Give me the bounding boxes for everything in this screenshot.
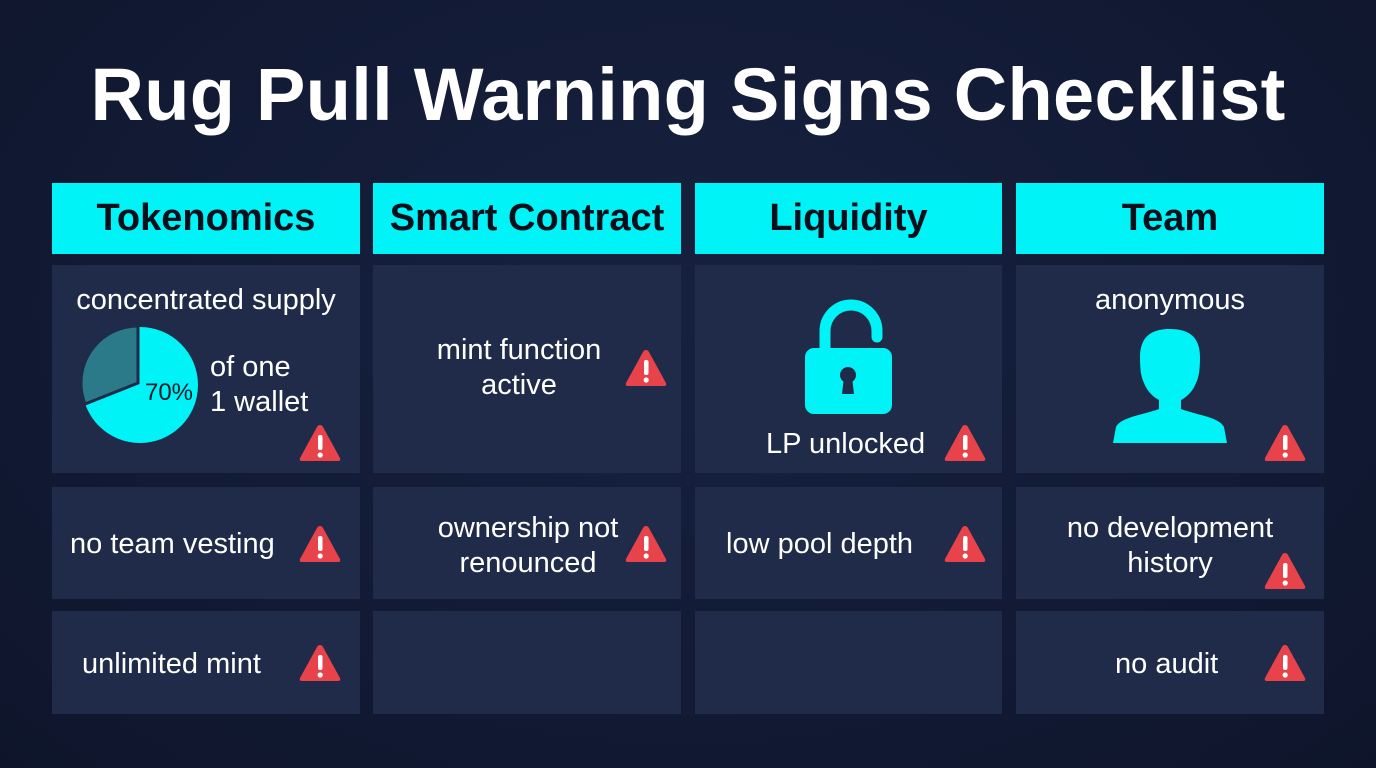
icon: warning bbox=[944, 526, 986, 562]
text: ownership not renounced bbox=[438, 512, 618, 579]
text: of one 1 wallet: of one bbox=[210, 351, 291, 383]
header: Tokenomics bbox=[52, 183, 360, 254]
icon: warning bbox=[1264, 553, 1306, 589]
panel: low pool depth bbox=[695, 487, 1002, 599]
chart: pie 70%: 70% bbox=[145, 379, 193, 406]
header: Team: Team bbox=[1122, 197, 1218, 239]
text: no development history bbox=[1067, 512, 1273, 579]
panel: no audit bbox=[1016, 611, 1324, 714]
text: low pool depth: low pool depth bbox=[726, 528, 913, 560]
text: no audit: no audit bbox=[1115, 648, 1218, 680]
panel: empty liquidity bbox=[695, 611, 1002, 714]
panel: ownership not renounced bbox=[373, 487, 681, 599]
title: Rug Pull Warning Signs Checklist bbox=[90, 53, 1286, 136]
text: no development history: history bbox=[1127, 547, 1213, 579]
header: Smart Contract bbox=[373, 183, 681, 254]
text: of one 1 wallet: 1 wallet bbox=[210, 386, 308, 418]
panel: unlimited mint bbox=[52, 611, 360, 714]
text: LP unlocked: LP unlocked bbox=[766, 428, 925, 460]
text: no development history: no development bbox=[1067, 512, 1273, 544]
header: Liquidity: Liquidity bbox=[769, 197, 928, 239]
icon: warning bbox=[1264, 425, 1306, 461]
icon: warning bbox=[944, 425, 986, 461]
header: Tokenomics: Tokenomics bbox=[97, 197, 315, 239]
panel: LP unlocked bbox=[695, 265, 1002, 473]
panel: no team vesting bbox=[52, 487, 360, 599]
text: unlimited mint: unlimited mint bbox=[82, 648, 261, 680]
panel: anonymous bbox=[1016, 265, 1324, 473]
text: anonymous: anonymous bbox=[1095, 284, 1245, 316]
icon: warning bbox=[300, 425, 340, 461]
text: mint function active bbox=[437, 334, 601, 401]
icon: open padlock bbox=[805, 300, 892, 414]
text: of one 1 wallet bbox=[210, 351, 308, 418]
text: concentrated supply: concentrated supply bbox=[76, 284, 336, 316]
text: no team vesting: no team vesting bbox=[70, 528, 275, 560]
chart: pie 70% bbox=[82, 327, 198, 443]
icon: person silhouette bbox=[1113, 329, 1227, 443]
panel: no development history bbox=[1016, 487, 1324, 599]
panel: empty smart contract bbox=[373, 611, 681, 714]
panel: mint function active bbox=[373, 265, 681, 473]
header: Liquidity bbox=[695, 183, 1002, 254]
text: ownership not renounced: renounced bbox=[459, 547, 597, 579]
text: mint function active: mint function bbox=[437, 334, 601, 366]
icon: warning bbox=[626, 350, 666, 386]
header: Team bbox=[1016, 183, 1324, 254]
panel: concentrated supply bbox=[52, 265, 360, 473]
icon: warning bbox=[300, 645, 340, 681]
icon: warning bbox=[300, 526, 340, 562]
text: mint function active: active bbox=[481, 369, 557, 401]
icon: warning bbox=[626, 526, 666, 562]
header: Smart Contract: Smart Contract bbox=[390, 197, 664, 239]
text: ownership not renounced: ownership not bbox=[438, 512, 618, 544]
icon: warning bbox=[1264, 645, 1306, 681]
